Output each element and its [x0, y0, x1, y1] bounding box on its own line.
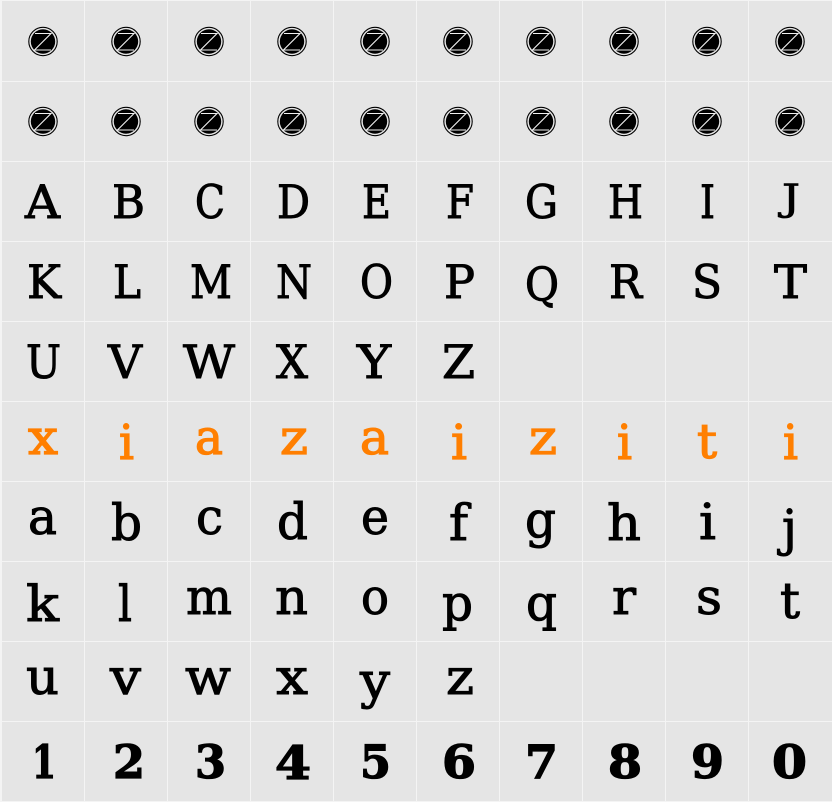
lowercase row: a to j: e [361, 488, 389, 546]
orange highlighted row: xiazaijiti letters: i [451, 415, 467, 471]
uppercase row: A to J: E [362, 175, 391, 229]
uppercase row: U to Z: X [276, 335, 308, 389]
lowercase row: u to z: w [185, 648, 231, 706]
uppercase row: K to T: T [774, 255, 807, 309]
numerals row: 1 to 0: 6 [442, 735, 476, 789]
lowercase row: u to z: x [276, 648, 308, 706]
uppercase row: A to J: H [608, 175, 643, 229]
numerals row: 1 to 0: 4 [275, 736, 311, 790]
lowercase row: k to t: o [361, 568, 389, 626]
uppercase row: K to T: Q [525, 257, 559, 311]
orange highlighted row: xiazaijiti letters: z [280, 410, 308, 466]
uppercase row: K to T: S [692, 255, 722, 309]
numerals row: 1 to 0: 7 [525, 735, 558, 789]
numerals row: 1 to 0: 3 [195, 735, 226, 789]
uppercase row: K to T: N [276, 255, 312, 309]
orange highlighted row: xiazaijiti letters: t [697, 414, 717, 470]
numerals row: 1 to 0: 2 [113, 735, 145, 789]
uppercase row: K to T: P [444, 255, 475, 309]
numerals row: 1 to 0: 9 [691, 735, 724, 789]
uppercase row: U to Z: V [107, 335, 143, 389]
numerals row: 1 to 0: 8 [608, 735, 642, 789]
lowercase row: a to j: f [449, 494, 472, 552]
lowercase row: k to t: m [186, 568, 232, 626]
lowercase row: a to j [28, 488, 797, 557]
lowercase row: a to j: b [111, 494, 142, 552]
orange highlighted row: xiazaijiti letters: x [28, 410, 58, 466]
orange highlighted row: xiazaijiti letters: i [617, 415, 632, 471]
lowercase row: a to j: i [699, 493, 716, 551]
uppercase row: A to J: J [778, 177, 800, 219]
uppercase row: A to J: D [277, 175, 310, 229]
uppercase row: U to Z [26, 335, 475, 389]
lowercase row: a to j: d [277, 493, 308, 551]
icon row 1: circled Z logos [29, 27, 804, 56]
uppercase row: A to J [24, 175, 800, 229]
uppercase row: A to J: I [700, 175, 715, 229]
lowercase row: a to j: c [196, 488, 223, 546]
lowercase row: k to t: q [526, 574, 557, 632]
numerals row: 1 to 0 [32, 735, 807, 790]
lowercase row: a to j: h [607, 494, 641, 552]
uppercase row: K to T: K [27, 255, 63, 309]
uppercase row: U to Z: W [183, 335, 236, 389]
lowercase row: k to t [26, 568, 800, 633]
lowercase row: k to t: t [780, 572, 800, 630]
uppercase row: A to J: C [195, 175, 225, 229]
uppercase row: A to J: B [112, 175, 145, 229]
uppercase row: A to J: A [24, 175, 61, 229]
lowercase row: a to j: j [777, 499, 797, 557]
lowercase row: k to t: k [26, 575, 60, 633]
lowercase row: k to t: s [696, 568, 722, 626]
lowercase row: u to z [26, 648, 474, 710]
lowercase row: k to t: r [612, 568, 636, 626]
uppercase row: U to Z: U [26, 335, 61, 389]
lowercase row: u to z: z [446, 648, 474, 706]
lowercase row: k to t: n [275, 568, 308, 626]
orange highlighted row: xiazaijiti letters [28, 410, 798, 471]
lowercase row: k to t: l [118, 575, 132, 633]
uppercase row: K to T: O [360, 255, 393, 309]
lowercase row: u to z: v [109, 648, 142, 706]
uppercase row: K to T [27, 255, 807, 311]
orange highlighted row: xiazaijiti letters: z [529, 410, 557, 466]
uppercase row: U to Z: Z [442, 335, 475, 389]
uppercase row: K to T: L [113, 255, 141, 309]
orange highlighted row: xiazaijiti letters: a [195, 410, 223, 466]
lowercase row: u to z: u [26, 648, 59, 706]
numerals row: 1 to 0: 1 [32, 735, 56, 789]
orange highlighted row: xiazaijiti letters: a [360, 410, 389, 466]
lowercase row: a to j: g [525, 491, 556, 549]
orange highlighted row: xiazaijiti letters: i [119, 415, 134, 471]
lowercase row: a to j: a [28, 488, 57, 546]
uppercase row: A to J: F [446, 175, 474, 229]
orange highlighted row: xiazaijiti letters: i [783, 415, 798, 471]
uppercase row: K to T: R [609, 255, 643, 309]
icon row 2: circled Z logos [29, 107, 804, 136]
lowercase row: u to z: y [359, 652, 391, 710]
uppercase row: A to J: G [525, 175, 558, 229]
numerals row: 1 to 0: 5 [360, 735, 391, 789]
uppercase row: K to T: M [190, 255, 232, 309]
numerals row: 1 to 0: 0 [772, 735, 807, 789]
uppercase row: U to Z: Y [356, 335, 392, 389]
lowercase row: k to t: p [442, 574, 473, 632]
